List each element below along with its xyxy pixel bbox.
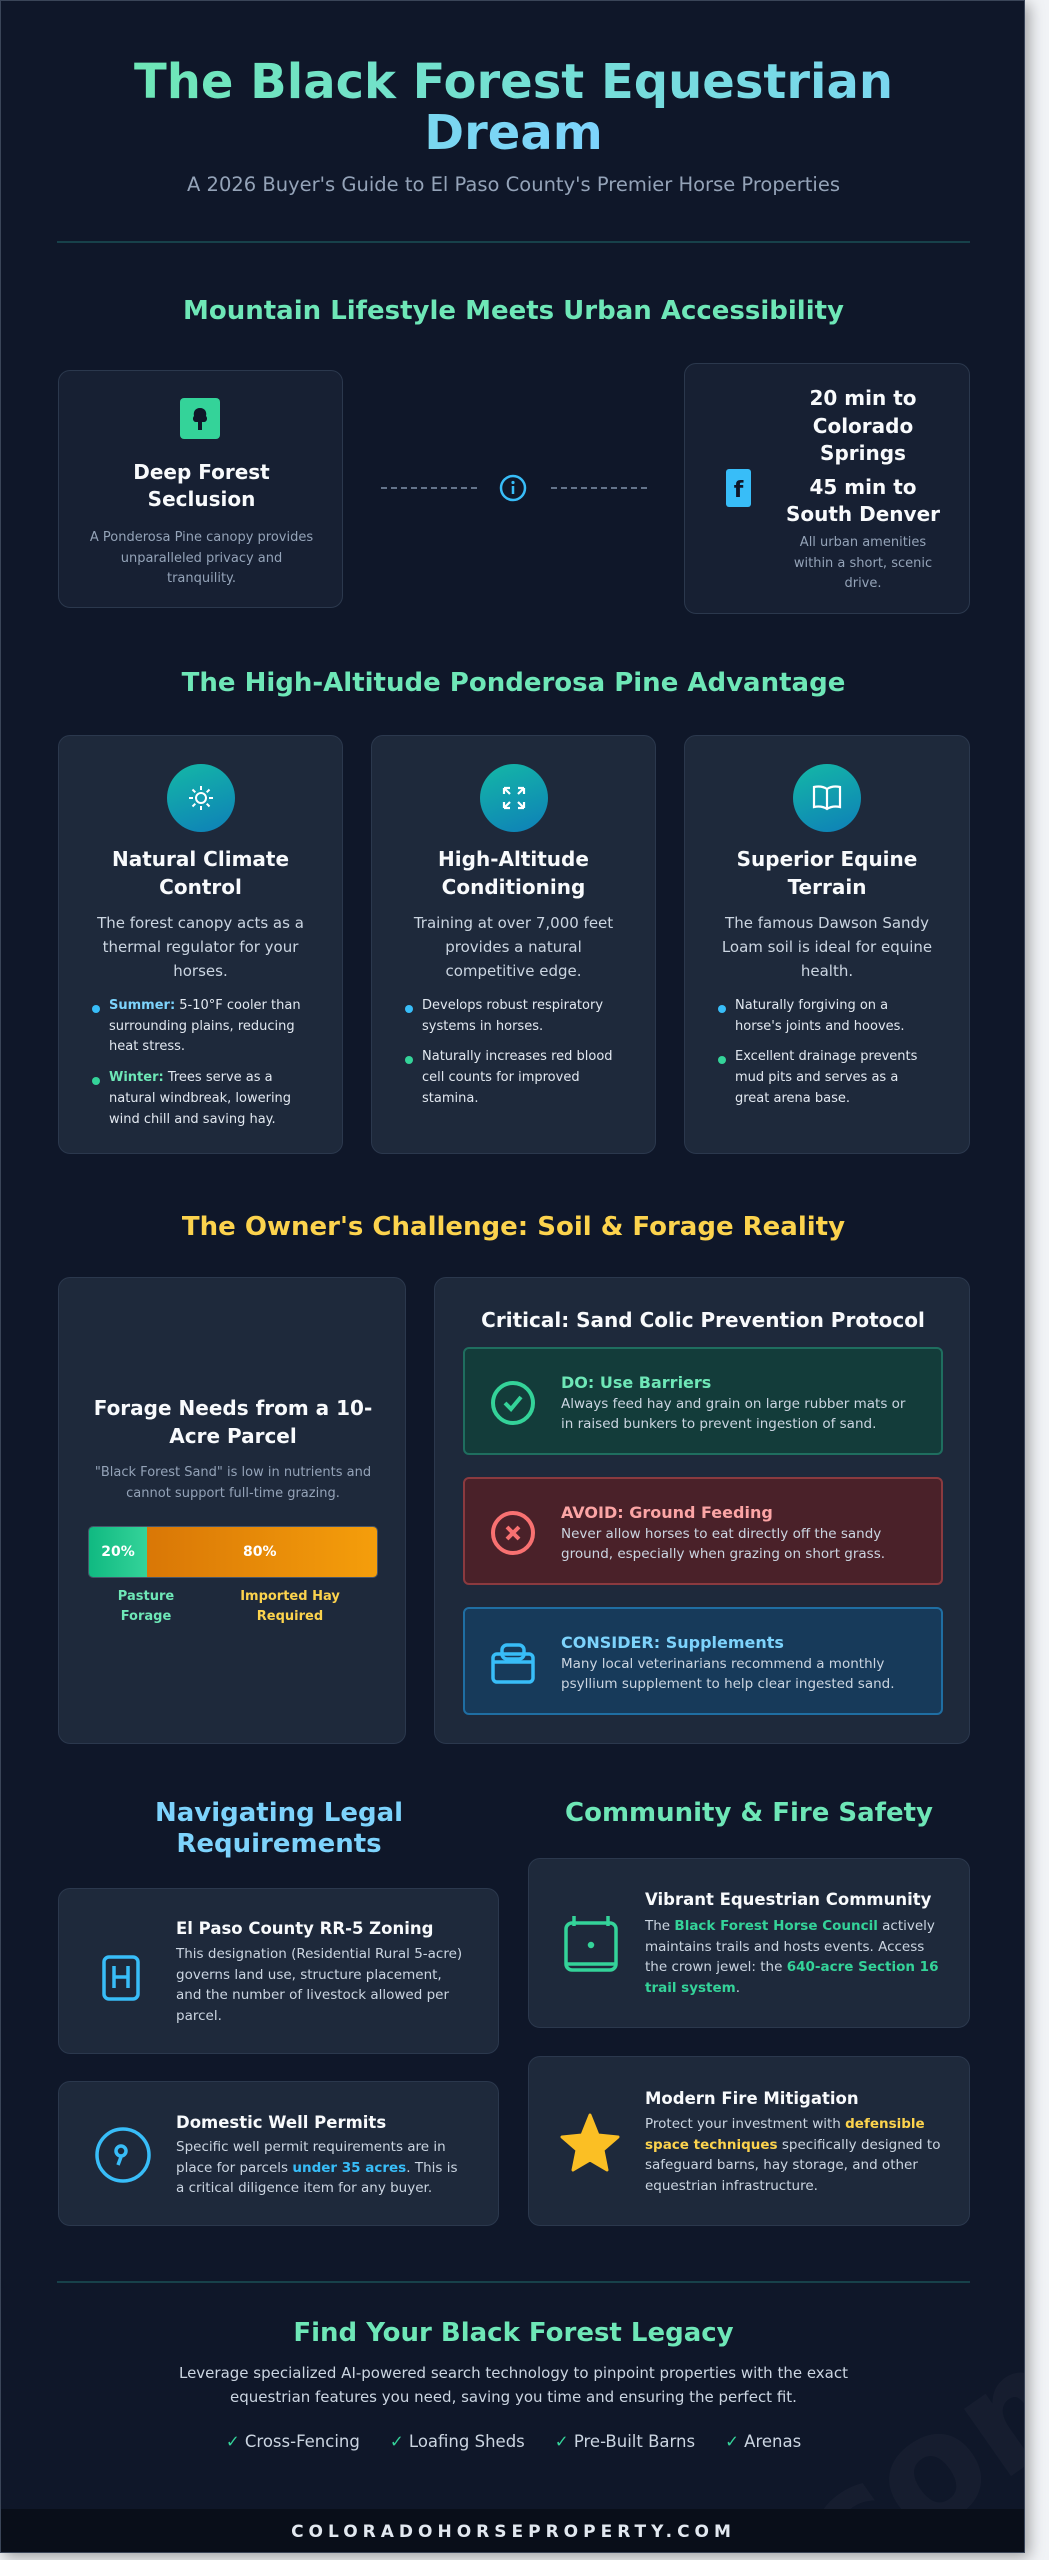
title: The Black Forest Equestrian: [134, 54, 893, 110]
item: avoid: Never allow horses to eat directly off the sandy ground, especially when grazing on short grass.: [561, 1526, 885, 1562]
heading: ponderosa advantage: The High-Altitude Ponderosa Pine Advantage: [182, 668, 845, 698]
footer: [1, 2509, 1026, 2555]
item: consider: Many local veterinarians recommend a monthly psyllium supplement to help clear ingested sand.: [561, 1656, 895, 1692]
text: cta paragraph: Leverage specialized AI-powered search technology to pinpoint properties with the exact equestrian features you need, saving you time and ensuring the perfect fit.: [179, 2364, 848, 2406]
desc: tranquility.: [167, 571, 236, 586]
panel: urban access: [684, 363, 970, 614]
icon: H sign: [102, 1955, 140, 2001]
icon: calendar: [564, 1916, 618, 1972]
icon: x: [491, 1511, 535, 1555]
icon: blue badge: [726, 469, 751, 507]
panel: equestrian community: The Black Forest Horse Council actively maintains trails and hosts events. Access the crown jewel: the 640-acre Section 16 trail system.: [645, 1918, 938, 1996]
feature checklist: ✓ Arenas: [725, 2432, 801, 2451]
desc: "Black Forest Sand" is low in nutrients and cannot support full-time grazing.: [95, 1465, 371, 1501]
title: Forage Needs from a 10-Acre Parcel: [94, 1396, 372, 1448]
item: consider: [463, 1607, 943, 1715]
heading: legal requirements: Navigating Legal: [155, 1798, 403, 1828]
icon: location pin circle: [95, 2127, 151, 2183]
panel: urban access: 45 min to South Denver: [786, 475, 940, 526]
panel: superior equine terrain: Superior Equine: [737, 847, 917, 871]
item: consider: CONSIDER: Supplements: [561, 1633, 784, 1652]
title: Dream: [424, 105, 603, 161]
panel: superior equine terrain: The famous Dawson Sandy Loam soil is ideal for equine health.: [722, 914, 932, 980]
travel times: 20 min to Colorado Springs: [810, 386, 916, 465]
item: do: [463, 1347, 943, 1455]
panel: high-altitude conditioning: Naturally increases red blood cell counts for improved stamina.: [422, 1049, 613, 1106]
panel: well permits: [58, 2081, 499, 2226]
panel: forage needs: [58, 1277, 406, 1744]
icon: blue badge: f: [734, 478, 743, 503]
panel: natural climate control: Control: [159, 875, 242, 899]
panel: high-altitude conditioning: Develops robust respiratory systems in horses.: [422, 998, 603, 1034]
item: avoid: AVOID: Ground Feeding: [561, 1503, 773, 1522]
panel: deep forest seclusion: [58, 370, 343, 608]
panel: superior equine terrain: Naturally forgiving on a horse's joints and hooves.: [735, 998, 905, 1034]
heading: find your legacy: Find Your Black Forest Legacy: [293, 2318, 734, 2348]
feature checklist: [226, 2432, 801, 2451]
heading: community & fire: Community & Fire Safety: [565, 1798, 933, 1828]
item: avoid: [463, 1477, 943, 1585]
item: do: Always feed hay and grain on large rubber mats or in raised bunkers to prevent ingestion of sand.: [561, 1396, 905, 1432]
item: do: DO: Use Barriers: [561, 1373, 711, 1392]
title: Critical: Sand Colic Prevention Protocol: [481, 1308, 925, 1332]
panel: natural climate control: Winter: Trees serve as a natural windbreak, lowering wind chill and saving hay.: [109, 1070, 291, 1127]
feature checklist: ✓ Cross-Fencing: [226, 2432, 360, 2451]
icon: star: [560, 2114, 620, 2172]
panel: superior equine terrain: Excellent drainage prevents mud pits and serves as a great arena base.: [735, 1049, 917, 1106]
panel: sand colic protocol: [434, 1277, 970, 1744]
panel: high-altitude conditioning: High-Altitude: [438, 847, 589, 871]
panel: fire mitigation: Protect your investment with defensible space techniques specifically designed to safeguard barns, hay storage, and other equestrian infrastructure.: [645, 2116, 940, 2194]
title: [134, 54, 893, 161]
panel: RR-5 zoning: This designation (Residential Rural 5-acre) governs land use, structure placement, and the number of livestock allowed per parcel.: [176, 1946, 462, 2024]
title: Seclusion: [148, 487, 255, 511]
bar chart: [88, 1526, 378, 1578]
feature checklist: ✓ Pre-Built Barns: [555, 2432, 695, 2451]
panel: high-altitude conditioning: [371, 735, 656, 1154]
panel: natural climate control: [58, 735, 343, 1154]
panel: natural climate control: Natural Climate: [112, 847, 289, 871]
heading: owner's challenge: The Owner's Challenge: Soil & Forage Reality: [182, 1212, 845, 1242]
subtitle: A 2026 Buyer's Guide to El Paso County's Premier Horse Properties: [187, 173, 840, 196]
panel: natural climate control: Summer: 5-10°F cooler than surrounding plains, reducing heat stress.: [109, 998, 301, 1054]
icon: check: [491, 1381, 535, 1425]
desc: A Ponderosa Pine canopy provides: [90, 530, 313, 545]
panel: superior equine terrain: Terrain: [788, 875, 866, 899]
desc: All urban amenities within a short, scenic drive.: [794, 535, 932, 591]
feature checklist: ✓ Loafing Sheds: [390, 2432, 525, 2451]
panel: natural climate control: The forest canopy acts as a thermal regulator for your horses.: [97, 914, 304, 980]
panel: high-altitude conditioning: Training at over 7,000 feet provides a natural competitive edge.: [414, 914, 613, 980]
heading: legal requirements: Requirements: [176, 1829, 382, 1859]
connector with info icon: [381, 474, 647, 502]
icon: expand arrows: [480, 764, 548, 832]
panel: equestrian community: [528, 1858, 970, 2028]
panel: RR-5 zoning: [58, 1888, 499, 2054]
panel: equestrian community: Vibrant Equestrian Community: [645, 1890, 931, 1909]
icon: supplement box: [491, 1643, 535, 1684]
title: [133, 460, 270, 511]
footer: COLORADOHORSEPROPERTY.COM: [291, 2522, 736, 2542]
heading: mountain lifestyle: Mountain Lifestyle Meets Urban Accessibility: [183, 296, 844, 326]
icon: book: [793, 764, 861, 832]
panel: superior equine terrain: [684, 735, 970, 1154]
legend labels: Pasture Forage: [118, 1589, 174, 1624]
bar chart: 80%: [243, 1544, 277, 1560]
panel: forage needs: Imported Hay Required: [240, 1589, 340, 1624]
heading: legal requirements: [155, 1798, 403, 1859]
desc: unparalleled privacy and: [121, 550, 282, 566]
panel: RR-5 zoning: El Paso County RR-5 Zoning: [176, 1919, 433, 1938]
icon: tree badge: [180, 398, 220, 439]
panel: well permits: Specific well permit requirements are in place for parcels under 35 acres. This is a critical diligence item for any buyer.: [176, 2139, 457, 2196]
panel: fire mitigation: [528, 2056, 970, 2226]
bar chart: 20%: [101, 1544, 135, 1560]
panel: high-altitude conditioning: Conditioning: [442, 875, 585, 899]
icon: sun: [166, 764, 234, 832]
panel: well permits: Domestic Well Permits: [176, 2113, 386, 2132]
title: Deep Forest: [133, 460, 270, 484]
desc: [90, 530, 313, 586]
panel: fire mitigation: Modern Fire Mitigation: [645, 2089, 859, 2108]
